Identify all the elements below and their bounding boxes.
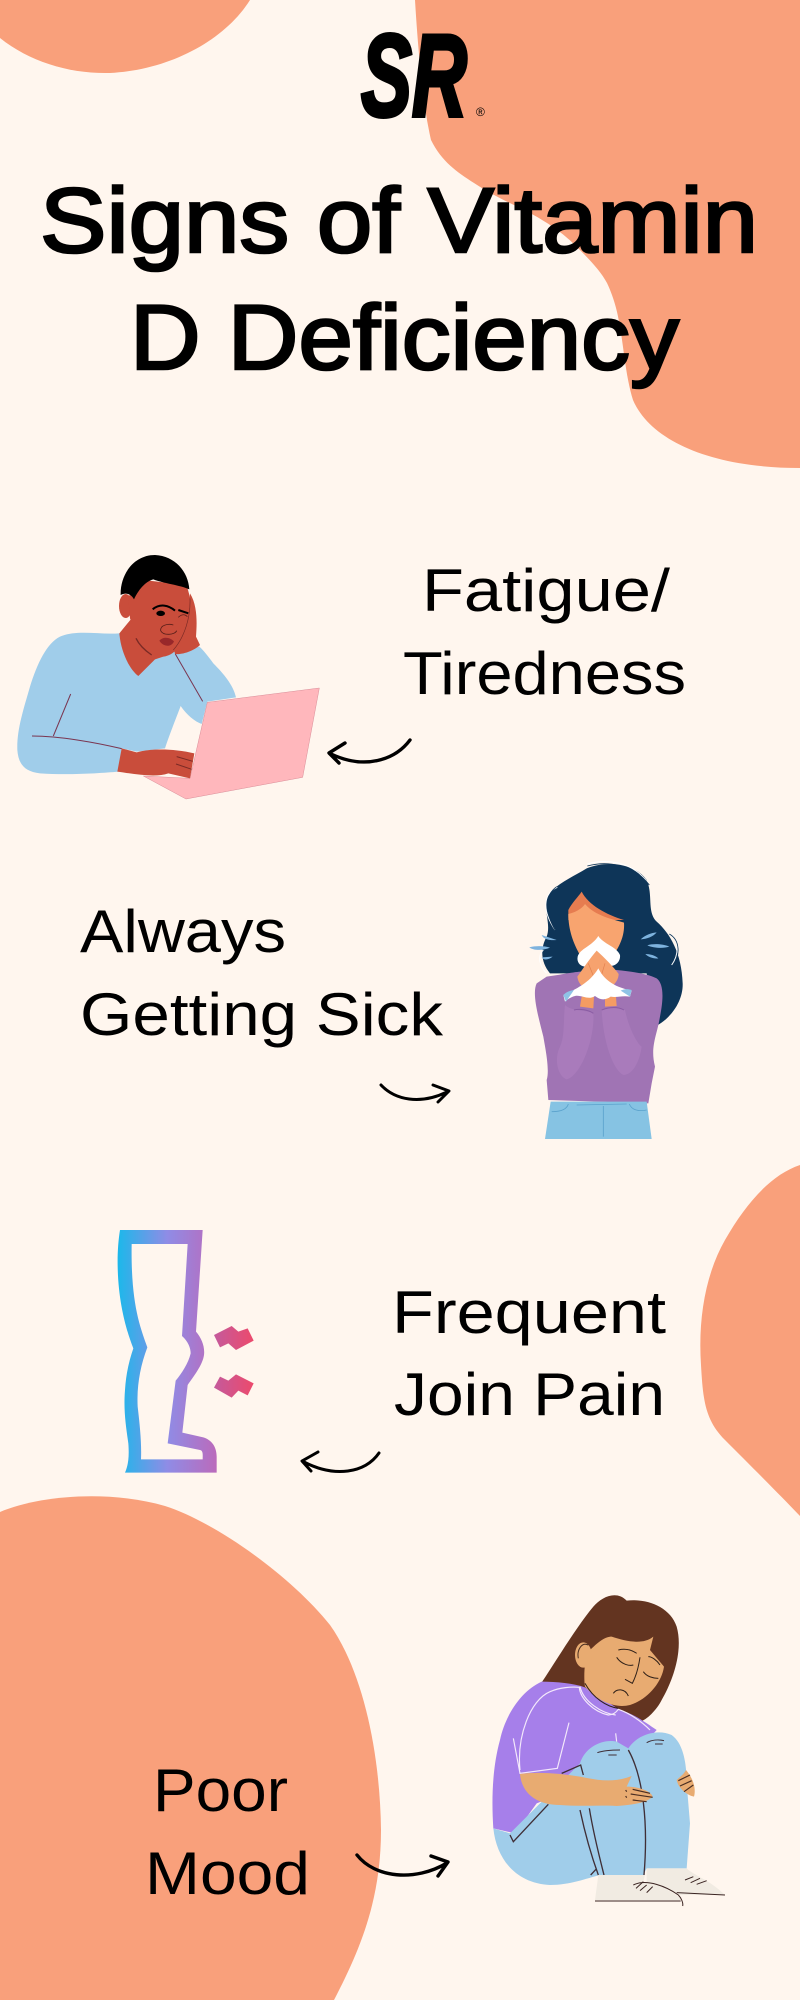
- face: [128, 580, 191, 657]
- label: joint pain: Join Pain: [394, 1361, 665, 1428]
- tissue top: [577, 936, 620, 967]
- facial features: [153, 606, 188, 613]
- sweater: [17, 633, 236, 774]
- label: sick: Getting Sick: [80, 981, 444, 1048]
- panel: joint pain: [118, 1230, 666, 1473]
- blob: top left: [0, 0, 250, 73]
- shoes: [647, 1868, 725, 1895]
- logo: SR: SR: [361, 10, 467, 141]
- leg lines: [510, 1750, 645, 1875]
- label: fatigue: Tiredness: [403, 640, 686, 707]
- hair: [121, 555, 189, 599]
- label: sick: Always: [80, 898, 286, 965]
- face lines: [585, 1649, 660, 1708]
- title: D Deficiency: [130, 287, 679, 389]
- arrow: to leg: [302, 1452, 379, 1472]
- far hand: [677, 1770, 695, 1797]
- arrow: to girl: [357, 1855, 448, 1876]
- arrow: to man: [329, 740, 410, 763]
- blob: top right: [415, 0, 800, 468]
- face: [568, 904, 624, 955]
- icon: leg with painful knee: [118, 1230, 254, 1473]
- sneeze drops: [529, 932, 669, 960]
- hair highlights: [540, 862, 677, 973]
- illustration: sad girl: [492, 1595, 725, 1906]
- panel: fatigue: [17, 555, 686, 799]
- hair: [540, 1595, 679, 1722]
- sweater fold lines: [32, 654, 203, 749]
- laptop: [143, 688, 319, 799]
- hands: [577, 951, 619, 992]
- arrow: to woman: [381, 1085, 449, 1102]
- legs: [493, 1732, 690, 1885]
- panel: poor mood: [145, 1595, 725, 1907]
- label: joint pain: Frequent: [392, 1279, 666, 1346]
- logo registered mark: ®: [476, 105, 485, 119]
- neck: [119, 618, 173, 676]
- ear: [119, 594, 132, 618]
- typing hand: [117, 748, 194, 778]
- illustration: woman sneezing: [529, 862, 683, 1139]
- shirt: [492, 1682, 657, 1833]
- tissue bottom: [563, 968, 632, 1002]
- label: poor mood: Poor: [153, 1757, 288, 1824]
- title: Signs of Vitamin: [40, 170, 758, 272]
- label: sick: [80, 898, 444, 1048]
- cuff lines: [574, 1007, 624, 1013]
- jeans: [545, 1102, 652, 1139]
- label: fatigue: [403, 557, 686, 707]
- label: fatigue: Fatigue/: [422, 557, 670, 624]
- supporting hand: [173, 593, 200, 654]
- sweater: [535, 970, 662, 1103]
- forehead shadow: [568, 892, 624, 920]
- pain marks: [214, 1326, 254, 1398]
- arm: [520, 1773, 653, 1806]
- neck & face: [584, 1637, 664, 1706]
- wrists: [580, 997, 617, 1008]
- illustration: tired man at laptop: [17, 555, 319, 799]
- label: poor mood: Mood: [145, 1840, 310, 1907]
- label: poor mood: [145, 1757, 310, 1907]
- sleeve shading: [557, 1005, 642, 1079]
- hair: [542, 864, 683, 1027]
- blob: right side: [700, 1165, 800, 1516]
- blob: bottom left: [0, 1496, 381, 2000]
- leg outline: [118, 1230, 217, 1473]
- panel: always getting sick: [80, 862, 683, 1139]
- label: joint pain: [392, 1279, 666, 1428]
- title: [40, 170, 758, 389]
